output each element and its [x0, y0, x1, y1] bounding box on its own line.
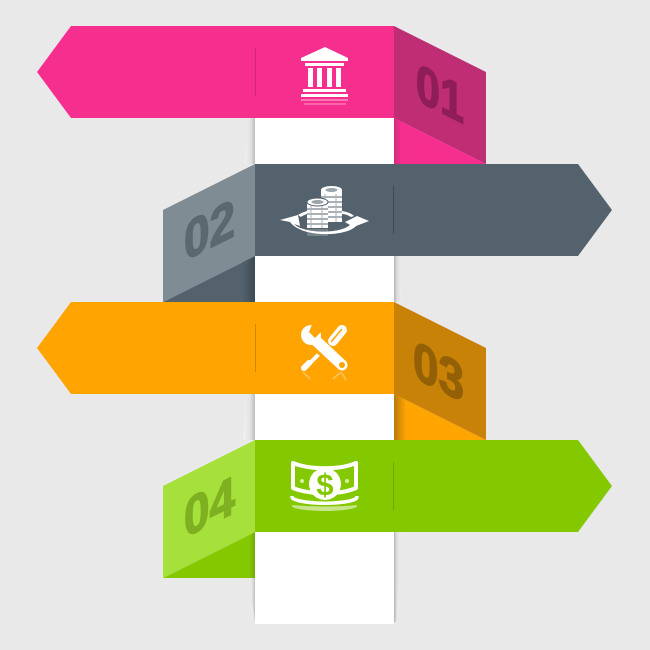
green fold underside — [163, 532, 255, 578]
reflection — [303, 372, 346, 380]
gray separator — [393, 186, 394, 234]
circular arrows — [280, 211, 369, 234]
icon: bank — [301, 47, 348, 105]
icon: banknote — [292, 463, 357, 511]
pink arrow — [37, 26, 394, 118]
gray fold underside — [163, 256, 255, 302]
back stack — [321, 186, 342, 222]
column shadows — [243, 118, 402, 622]
green arrow — [255, 440, 612, 532]
green fold — [163, 440, 255, 578]
green separator — [393, 462, 394, 510]
icon: tools — [301, 322, 346, 380]
icon: coins — [280, 186, 369, 236]
reflection — [307, 229, 328, 236]
panel: 04 green — [163, 440, 612, 578]
orange fold — [394, 302, 486, 440]
orange arrow — [37, 302, 394, 394]
number 03: 03 — [413, 329, 464, 415]
pink fold underside — [394, 118, 486, 164]
gray fold — [163, 164, 255, 302]
screwdriver — [333, 330, 342, 341]
icon: banknote: $ — [316, 467, 334, 502]
pink fold — [394, 26, 486, 164]
number 01: 01 — [416, 52, 464, 136]
gray arrow — [255, 164, 612, 256]
panel: 02 gray — [163, 164, 612, 302]
number 04: 04 — [184, 464, 235, 550]
panel: 03 orange — [37, 302, 486, 440]
wrench — [313, 342, 342, 365]
white central column — [255, 118, 394, 624]
orange fold underside — [394, 394, 486, 440]
number 02: 02 — [184, 187, 235, 273]
orange separator — [255, 324, 256, 372]
panel: 01 pink — [37, 26, 486, 164]
pink separator — [255, 48, 256, 96]
front stack — [307, 198, 328, 228]
